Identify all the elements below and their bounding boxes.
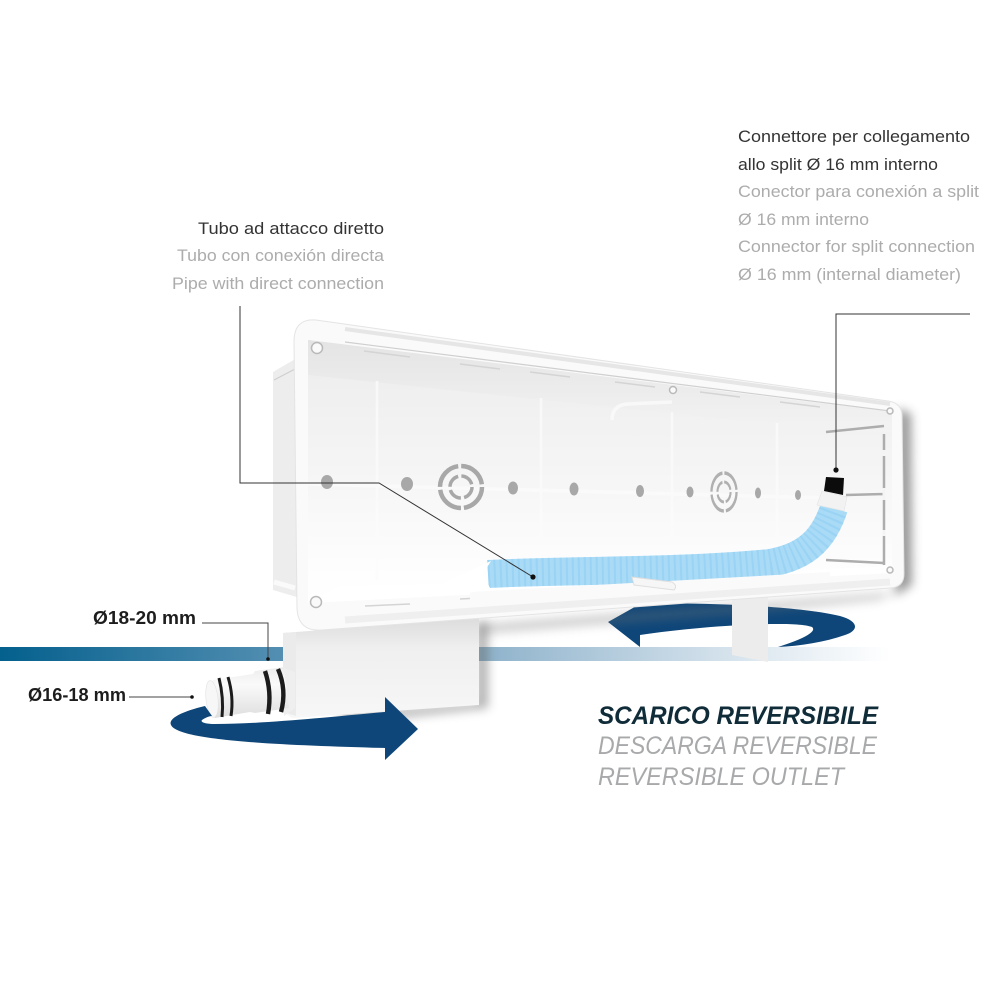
ribs — [308, 381, 825, 580]
interior back wall — [308, 340, 892, 603]
label: connector: Connettore per collegamento — [738, 127, 970, 146]
heading: reversible outlet — [598, 702, 879, 791]
white blob at tube end — [430, 561, 491, 596]
front frame — [294, 320, 904, 630]
vent grille right — [711, 473, 737, 511]
front rotation arrow — [171, 697, 418, 760]
box shadow below — [480, 592, 895, 634]
label: connector: Ø 16 mm (internal diameter) — [738, 265, 961, 284]
label: connector — [738, 127, 979, 284]
rear rotation arrow — [608, 604, 855, 647]
label: direct pipe — [172, 219, 385, 293]
floor lip over tube — [470, 572, 830, 604]
label: connector: Conector para conexión a split — [738, 182, 979, 201]
leader: 16-18 — [129, 695, 194, 699]
outlet housing — [283, 618, 479, 718]
side slots — [826, 426, 884, 565]
vent grille left — [440, 466, 482, 508]
round holes — [321, 475, 801, 500]
frame detail lines — [345, 329, 890, 404]
dimension labels — [28, 608, 196, 705]
interior floor — [308, 566, 892, 603]
tabs — [364, 351, 820, 606]
leader: direct pipe — [240, 306, 536, 580]
leader: 18-20 — [202, 623, 270, 661]
white clip on tube — [632, 577, 676, 590]
housing shadow — [340, 622, 488, 724]
dimension labels: Ø18-20 mm — [93, 608, 196, 628]
heading: reversible outlet: SCARICO REVERSIBILE — [598, 702, 879, 730]
connector — [817, 477, 847, 511]
label: connector: Ø 16 mm interno — [738, 210, 869, 229]
interior ceiling — [308, 340, 892, 432]
box body — [273, 320, 904, 630]
blue corrugated tube — [488, 508, 834, 574]
label: direct pipe: Tubo ad attacco diretto — [198, 219, 384, 238]
blue horizontal bar — [0, 647, 890, 661]
leader: connector — [833, 314, 970, 473]
screw holes — [310, 342, 893, 608]
label: connector: Connector for split connection — [738, 237, 975, 256]
heading: reversible outlet: DESCARGA REVERSIBLE — [598, 732, 877, 760]
heading: reversible outlet: REVERSIBLE OUTLET — [598, 763, 846, 791]
mounting plate — [732, 596, 768, 662]
side wall — [273, 358, 300, 598]
outlet nozzle — [204, 667, 295, 718]
label: connector: allo split Ø 16 mm interno — [738, 155, 938, 174]
dimension labels: Ø16-18 mm — [28, 685, 126, 705]
label: direct pipe: Tubo con conexión directa — [177, 246, 385, 265]
box shadow right — [895, 408, 912, 596]
label: direct pipe: Pipe with direct connection — [172, 274, 384, 293]
